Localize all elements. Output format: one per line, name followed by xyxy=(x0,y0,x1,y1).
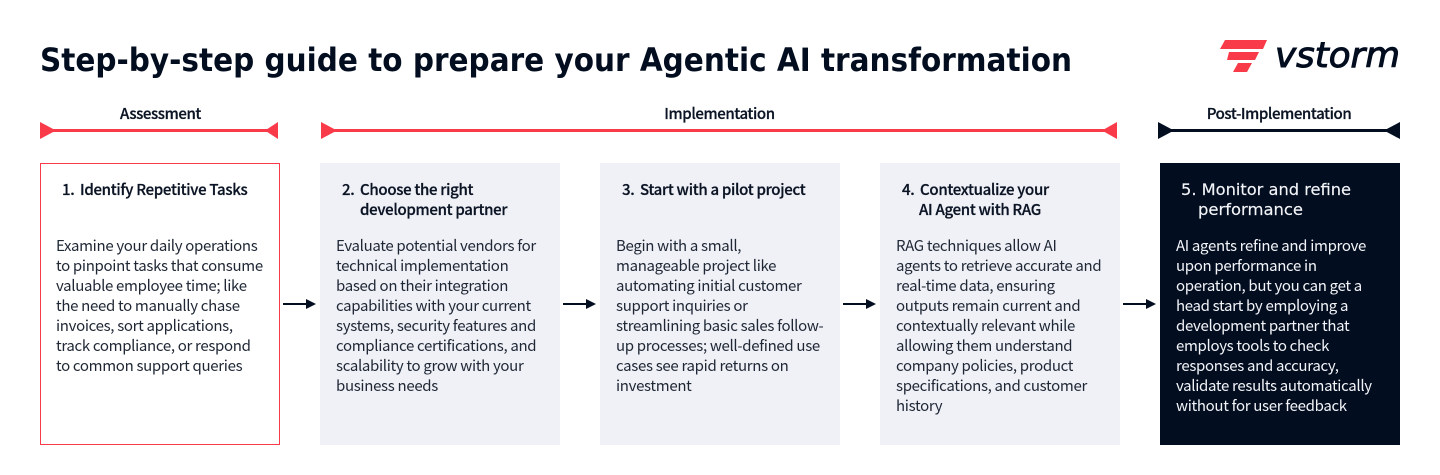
panel: step 2 xyxy=(320,163,560,445)
panel: step 5: responses and accuracy, xyxy=(1176,355,1339,376)
panel: step 4: specifications, and customer xyxy=(896,375,1087,396)
panel: step 1: Identify Repetitive Tasks xyxy=(80,179,248,200)
panel: step 1: to common support queries xyxy=(56,355,243,376)
panel: step 4: agents to retrieve accurate and xyxy=(896,255,1101,276)
panel: step 5: without for user feedback xyxy=(1176,395,1348,416)
panel: step 5: 5. Monitor and refine xyxy=(1181,180,1351,199)
panel: step 1: 1. xyxy=(62,179,74,200)
arrow: step 3 to 4 xyxy=(843,299,876,309)
panel: step 2: business needs xyxy=(336,375,438,396)
panel: step 5: head start by employing a xyxy=(1176,295,1348,316)
panel: step 3 xyxy=(600,163,840,445)
panel: step 5: development partner that xyxy=(1176,315,1350,336)
panel: step 3: Begin with a small, xyxy=(616,235,741,256)
arrow: step 4 to 5 xyxy=(1123,299,1156,309)
panel: step 1: invoices, sort applications, xyxy=(56,315,233,336)
panel: step 5: employs tools to check xyxy=(1176,335,1330,356)
panel: step 4: history xyxy=(896,395,943,416)
panel: step 3: manageable project like xyxy=(616,255,776,276)
logo: vstorm xyxy=(1220,36,1400,76)
panel: step 5 xyxy=(1160,163,1400,445)
phase: Post-Implementation: Post-Implementation xyxy=(1207,103,1351,124)
panel: step 2: development partner xyxy=(360,199,508,220)
panel: step 2: technical implementation xyxy=(336,255,508,276)
panel: step 5: validate results automatically xyxy=(1176,375,1372,396)
panel: step 2: scalability to grow with your xyxy=(336,355,524,376)
panel: step 1: the need to manually chase xyxy=(56,295,240,316)
panel: step 5: upon performance in xyxy=(1176,255,1317,276)
panel: step 3: up processes; well-defined use xyxy=(616,335,820,356)
panel: step 2: Choose the right xyxy=(360,179,474,200)
panel: step 4: RAG techniques allow AI xyxy=(896,235,1057,256)
phase: Implementation xyxy=(321,103,1117,139)
panel: step 3: investment xyxy=(616,375,692,396)
panel: step 3: automating initial customer xyxy=(616,275,802,296)
panel: step 2: compliance certifications, and xyxy=(336,335,536,356)
panel: step 3: support inquiries or xyxy=(616,295,748,316)
panel: step 2: 2. xyxy=(342,179,354,200)
panel: step 2: based on their integration xyxy=(336,275,508,296)
arrow: step 1 to 2 xyxy=(283,299,316,309)
panel: step 1 xyxy=(40,164,280,444)
panel: step 5: operation, but you can get a xyxy=(1176,275,1362,296)
panel: step 5: AI agents refine and improve xyxy=(1176,235,1366,256)
phase: Implementation: Implementation xyxy=(664,103,775,124)
logo: vstorm: vstorm xyxy=(1275,36,1400,76)
panel: step 3: 3. xyxy=(622,179,634,200)
panel: step 4: real-time data, ensuring xyxy=(896,275,1056,296)
panel: step 4: contextually relevant while xyxy=(896,315,1075,336)
panel: step 2: Evaluate potential vendors for xyxy=(336,235,536,256)
title: Step-by-step guide to prepare your Agentic AI transformation xyxy=(40,41,1072,79)
panel: step 3: streamlining basic sales follow- xyxy=(616,315,824,336)
panel: step 4: allowing them understand xyxy=(896,335,1072,356)
panel: step 1: track compliance, or respond xyxy=(56,335,251,356)
panel: step 2: systems, security features and xyxy=(336,315,536,336)
panel: step 4: 4. xyxy=(902,179,914,200)
panel: step 4: outputs remain current and xyxy=(896,295,1080,316)
phase: Assessment: Assessment xyxy=(120,103,201,124)
panel: step 1: to pinpoint tasks that consume xyxy=(56,255,263,276)
panel: step 2: capabilities with your current xyxy=(336,295,532,316)
panel: step 4 xyxy=(880,163,1120,445)
panel: step 4: Contextualize your xyxy=(920,179,1050,200)
panel: step 1: Examine your daily operations xyxy=(56,235,258,256)
panel: step 3: cases see rapid returns on xyxy=(616,355,788,376)
panel: step 4: company policies, product xyxy=(896,355,1074,376)
phase: Post-Implementation xyxy=(1158,103,1400,139)
panel: step 4: AI Agent with RAG xyxy=(919,199,1041,220)
arrow: step 2 to 3 xyxy=(563,299,596,309)
panel: step 3: Start with a pilot project xyxy=(640,179,806,200)
phase: Assessment xyxy=(40,103,278,139)
panel: step 5: performance xyxy=(1198,200,1303,219)
panel: step 1: valuable employee time; like xyxy=(56,275,247,296)
